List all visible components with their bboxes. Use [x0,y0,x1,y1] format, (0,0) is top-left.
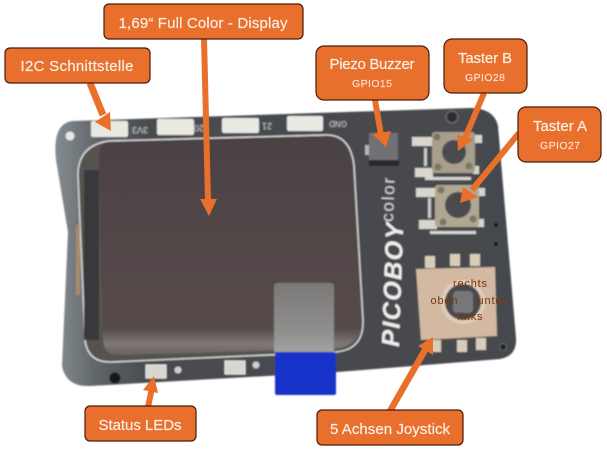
pad labels: 21 [262,121,272,131]
joystick direction labels: oben [430,295,458,307]
button A [416,185,485,234]
joystick direction labels: rechts [453,278,488,290]
joystick direction labels: unten [478,295,508,307]
status LEDs [146,361,260,378]
display glass [78,135,363,362]
blue pull tab [275,352,336,395]
callout: 5 Achsen Joystick: 5 Achsen Joystick [330,421,450,438]
callout: Taster A: GPIO27 [540,140,580,152]
callout: Piezo Buzzer: Piezo Buzzer [330,56,414,73]
callout: Piezo Buzzer: GPIO15 [352,78,392,90]
callout: display: 1,69“ Full Color - Display [118,15,288,32]
transparent tape [274,283,334,353]
pad labels: GND [329,119,347,128]
callout: I2C Schnittstelle [5,48,150,83]
callout: display [104,4,303,39]
callout: Taster B: GPIO28 [465,72,505,84]
logo: PICOBOY color: PICOBOY [377,220,409,347]
callout: Piezo Buzzer [316,46,429,100]
arrow: button B [457,93,484,151]
I2C solder pads [91,116,323,137]
pad labels [132,119,347,135]
pad labels: 3V3 [132,125,148,135]
callout: Taster A [518,107,601,162]
arrow: joystick [390,337,433,411]
circuit board [55,108,516,386]
arrow: status LEDs [143,376,158,407]
display left bezel [84,170,99,340]
callout: Taster B: Taster B [458,50,512,67]
callout: Taster A: Taster A [533,118,587,135]
display screen [99,136,361,355]
joystick [416,254,497,352]
joystick direction labels: links [458,311,483,323]
piezo buzzer [365,133,399,166]
callout: Status LEDs [85,406,196,441]
joystick direction labels [430,278,508,323]
mounting holes [66,111,506,384]
arrow: button A [460,133,519,203]
photo: PicoBoy Color board [55,108,516,395]
pad labels: 20 [194,123,204,133]
arrow: I2C to pad [90,83,111,131]
callout: Status LEDs: Status LEDs [98,417,182,434]
arrow: piezo buzzer [372,100,391,147]
logo: PICOBOY color: color [378,177,399,222]
callout: 5 Achsen Joystick [317,410,463,445]
arrow: display [200,39,217,216]
callout: Taster B [444,39,527,93]
button B [412,132,482,180]
callout: I2C Schnittstelle: I2C Schnittstelle [20,58,134,75]
